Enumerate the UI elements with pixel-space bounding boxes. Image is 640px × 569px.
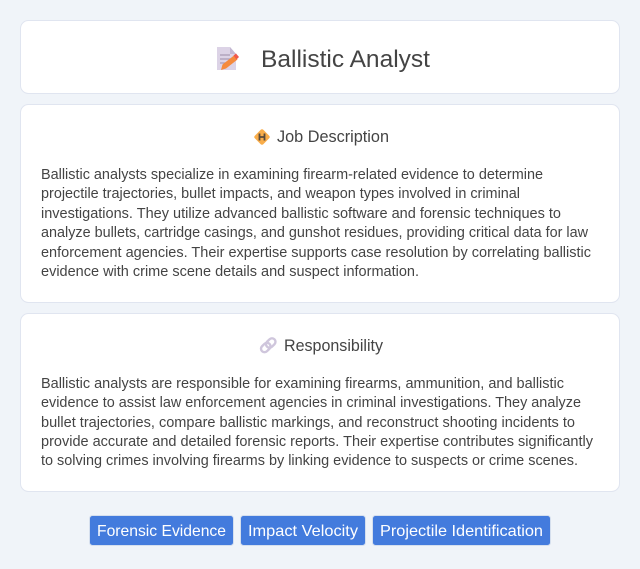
tag: projectile identification: Projectile Identification [380,523,543,540]
panel: title card [20,20,620,94]
heading: job description: Job Description [277,128,389,146]
text: job description body: analyze bullets, cartridge casings, and gunshot residues, providing critical data for law [41,224,588,241]
text: job description body: Ballistic analysts specialize in examining firearm-related evidence to determine [41,166,543,183]
text: job description body: investigations. They utilize advanced ballistic software and forensic techniques to [41,205,561,222]
tag: impact velocity [240,516,366,546]
text: responsibility body: Ballistic analysts are responsible for examining firearms, ammunition, and ballistic [41,375,564,392]
text: job description body: enforcement agencies. Their expertise supports case resolution by correlating ballistic [41,244,591,261]
tag: impact velocity: Impact Velocity [248,523,358,540]
tag: forensic evidence [90,516,234,546]
icon: chain link [260,337,277,354]
text: responsibility body [41,375,593,469]
text: job description body [41,166,591,280]
title: Ballistic Analyst [261,46,430,73]
panel: job description [20,104,620,302]
heading: responsibility: Responsibility [284,337,384,355]
panel: responsibility [20,314,620,492]
tag: forensic evidence: Forensic Evidence [97,523,226,540]
text: responsibility body: to solving crimes involving firearms by linking evidence to suspects or crime scenes. [41,452,578,469]
icon: diamond sign [254,129,270,145]
text: responsibility body: evidence to assist law enforcement agencies in criminal investigations. They analyze [41,394,581,411]
text: responsibility body: bullet trajectories, compare ballistic markings, and reconstruct shooting incidents to [41,414,575,431]
icon: document with pencil [217,47,239,70]
tag: projectile identification [372,516,550,546]
text: responsibility body: provide accurate and detailed forensic reports. Their expertise contributes significantly [41,433,593,450]
text: job description body: projectile trajectories, bullet impacts, and weapon types involved in criminal [41,185,520,202]
text: job description body: evidence with crime scene details and suspect information. [41,263,419,280]
